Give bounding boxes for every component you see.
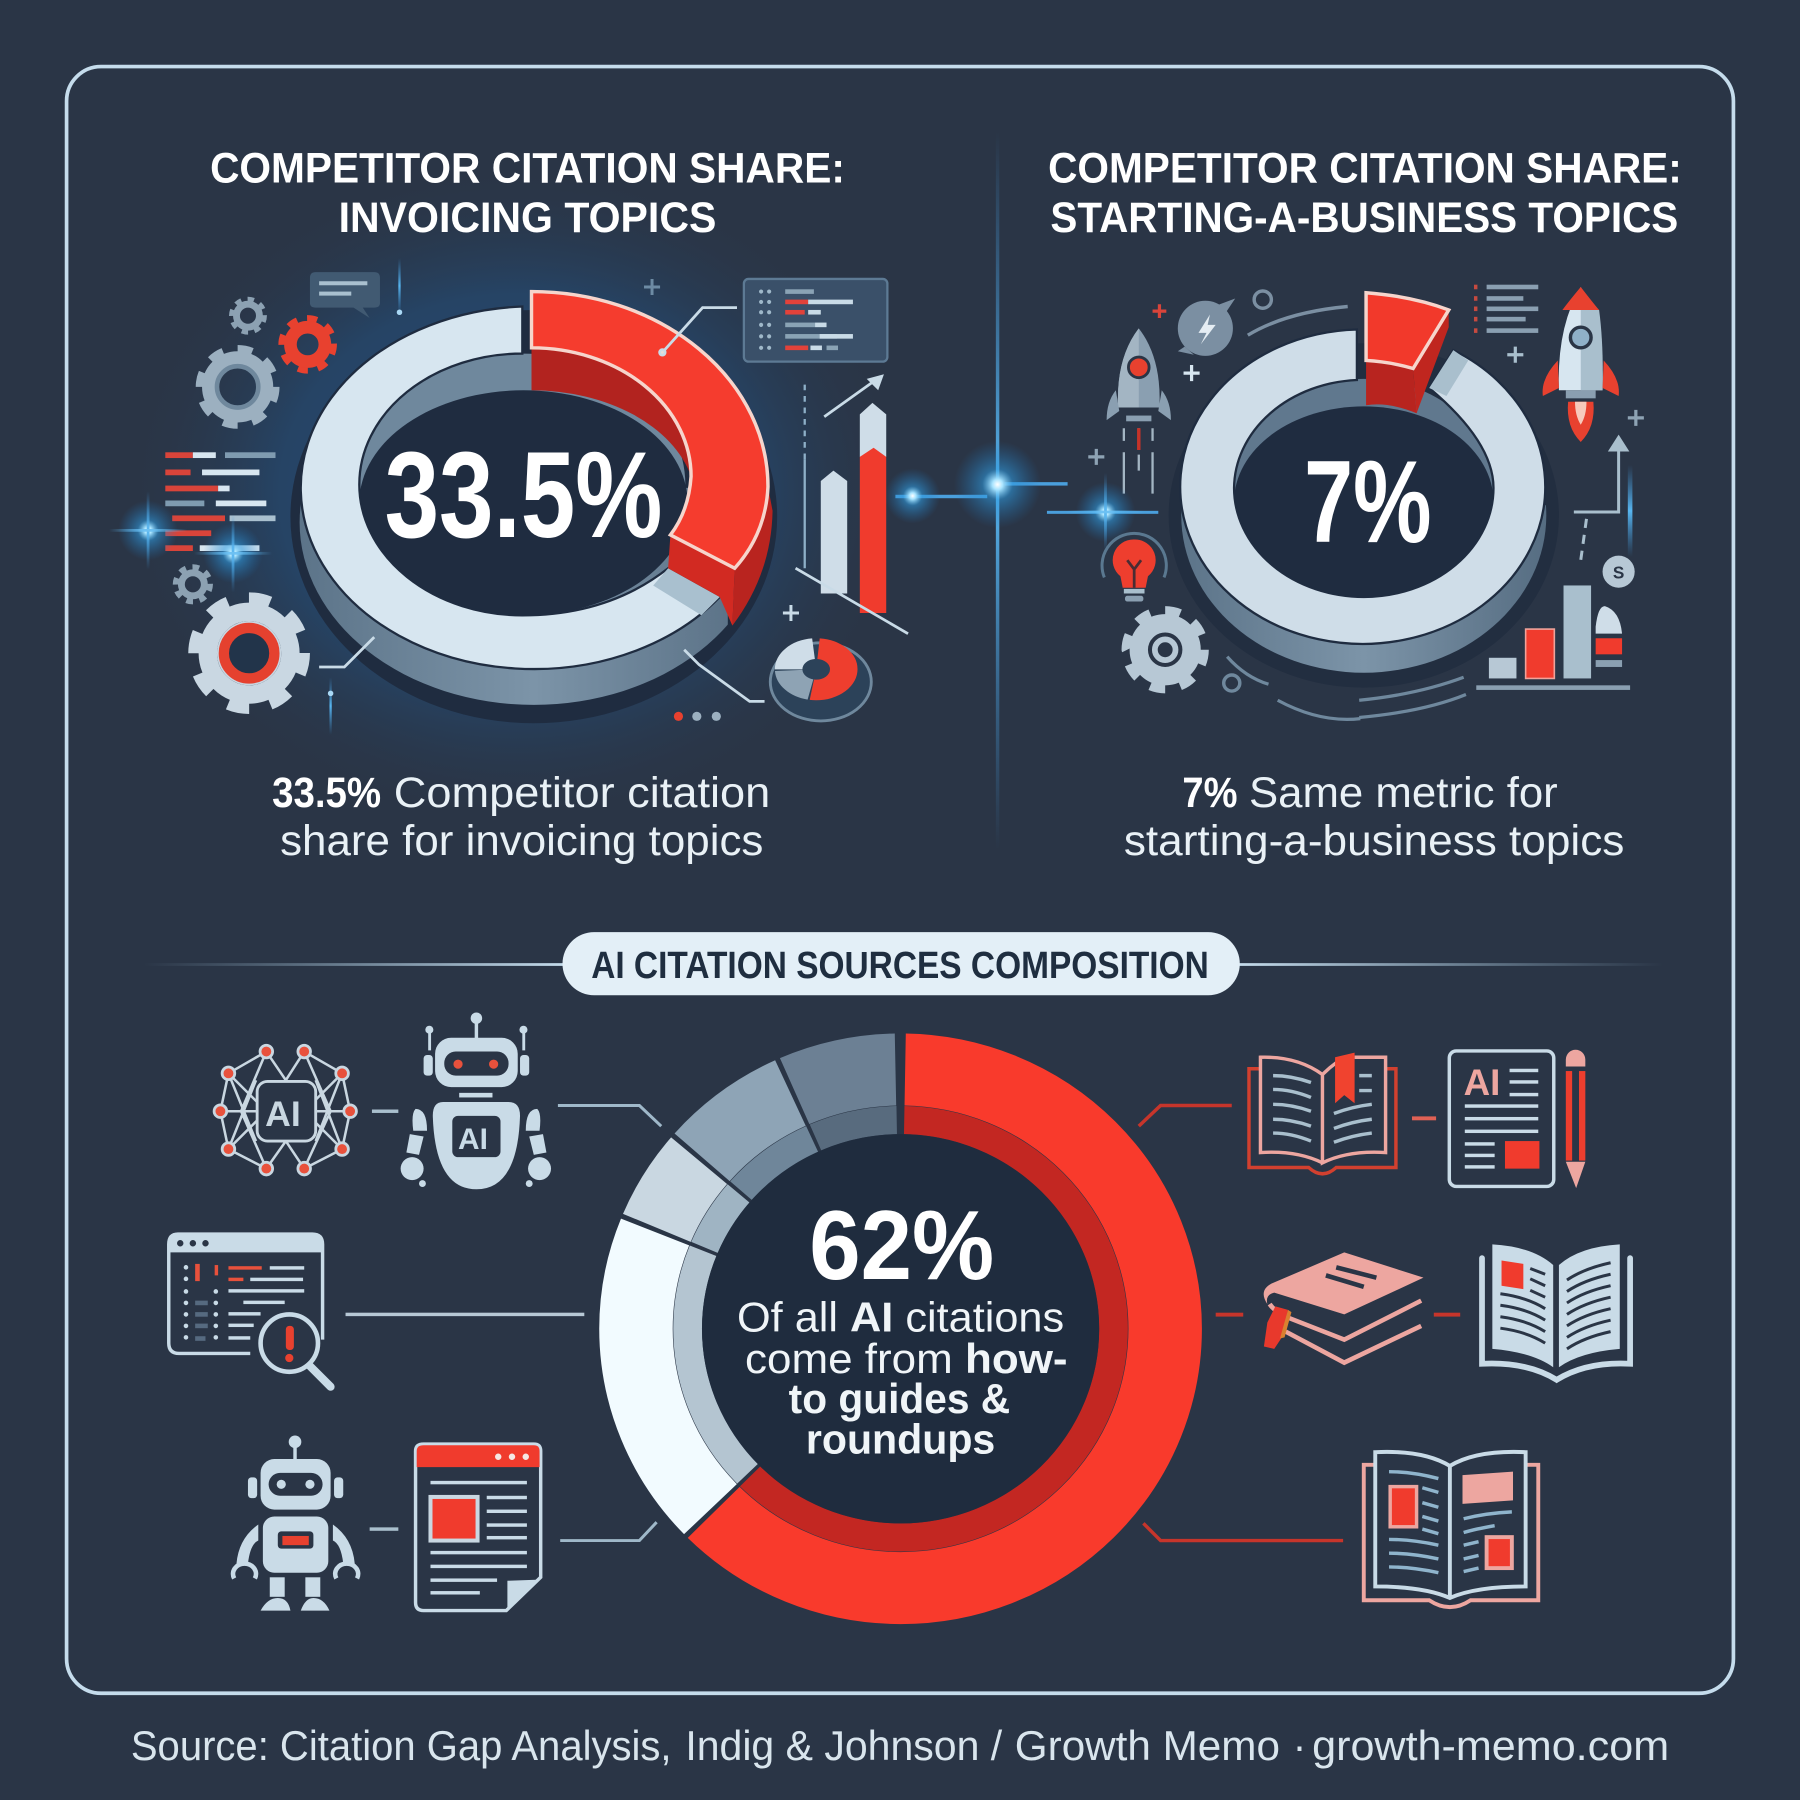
icon: lightbulb bbox=[1102, 533, 1166, 602]
connector: gear to donut bbox=[319, 637, 374, 667]
donut: starting a business 7% bbox=[1169, 293, 1559, 688]
connector: robot to donut bbox=[558, 1105, 661, 1126]
source line: Growth Memo bbox=[1015, 1723, 1280, 1769]
rocket white bbox=[1543, 287, 1619, 442]
centre light divider bbox=[885, 132, 1068, 849]
centre description bbox=[737, 1295, 1068, 1462]
chat bubble bbox=[310, 272, 380, 318]
source line: growth-memo.com bbox=[1312, 1723, 1669, 1769]
icon: AI neural network: AI bbox=[265, 1094, 301, 1134]
connector dash bbox=[1216, 1313, 1243, 1317]
connector: document to donut bbox=[560, 1522, 657, 1541]
source line bbox=[131, 1723, 1669, 1769]
growth arrow bbox=[1574, 437, 1627, 560]
icon: robot bbox=[233, 1436, 358, 1611]
plus marks left bbox=[644, 279, 799, 621]
icon: open book with bookmark bbox=[1249, 1053, 1396, 1174]
caption: starting a business bbox=[1124, 769, 1624, 864]
icon: AI article bbox=[1449, 1051, 1554, 1186]
centre value: 62%: 62% bbox=[809, 1190, 994, 1300]
title: invoicing: INVOICING TOPICS bbox=[339, 194, 716, 241]
icon: stacked books bbox=[1264, 1252, 1423, 1363]
gear large gray bbox=[201, 350, 274, 424]
connector: donut base to mini pie bbox=[684, 650, 765, 701]
icon: AI robot: AI bbox=[458, 1123, 488, 1156]
caption: starting a business: 7% bbox=[1182, 769, 1238, 816]
rocket gray bbox=[1107, 328, 1171, 494]
connector dash bbox=[372, 1110, 398, 1113]
connector dash bbox=[1412, 1116, 1436, 1120]
icon: bolt bubble bbox=[1178, 298, 1235, 356]
connector dash bbox=[370, 1527, 398, 1531]
code panel bbox=[744, 279, 887, 362]
pager dots bbox=[674, 712, 721, 721]
gear small lower bbox=[176, 567, 210, 602]
caption: starting a business: Same metric for bbox=[1249, 769, 1558, 816]
section heading pill: AI CITATION SOURCES COMPOSITION bbox=[591, 945, 1209, 987]
donut: invoicing 33.5% bbox=[290, 292, 777, 723]
value: 7%: 7% bbox=[1304, 436, 1432, 567]
centre description: to guides & bbox=[789, 1376, 1010, 1422]
light sparks right bbox=[1047, 465, 1632, 557]
gear red bbox=[282, 319, 333, 370]
caption: invoicing: 33.5% bbox=[272, 769, 381, 816]
connector: donut to lower book bbox=[1143, 1523, 1343, 1541]
glow behind invoicing donut bbox=[121, 161, 913, 827]
light sparks left bbox=[109, 491, 272, 592]
coin bbox=[1603, 556, 1635, 588]
title: starting a business bbox=[1048, 145, 1682, 241]
gear right bbox=[1127, 612, 1203, 688]
mini pie bbox=[770, 643, 871, 721]
title: invoicing bbox=[210, 145, 845, 241]
centre description: roundups bbox=[806, 1416, 995, 1462]
section heading pill bbox=[562, 932, 1240, 995]
caption: invoicing: Competitor citation bbox=[394, 769, 770, 816]
title: starting a business: COMPETITOR CITATION SHARE: bbox=[1048, 145, 1682, 192]
title: starting a business: STARTING-A-BUSINESS TOPICS bbox=[1050, 194, 1678, 241]
icon: AI article: AI bbox=[1464, 1062, 1500, 1103]
lower arcs right bbox=[1224, 657, 1466, 719]
donut: AI citation sources bbox=[636, 1069, 1165, 1588]
connector: donut to book bbox=[1139, 1105, 1232, 1126]
icon: pencil bbox=[1566, 1050, 1585, 1188]
section rules bbox=[143, 963, 1663, 966]
icon: AI robot bbox=[401, 1012, 551, 1189]
code lines left bbox=[165, 452, 276, 551]
icon: blue open book bbox=[1482, 1244, 1630, 1380]
coin: S bbox=[1613, 563, 1624, 583]
icon: magazine book bbox=[1364, 1452, 1538, 1607]
title: invoicing: COMPETITOR CITATION SHARE: bbox=[210, 145, 845, 192]
plus marks right bbox=[1088, 304, 1644, 465]
gear big red ring bbox=[196, 600, 302, 706]
bar chart right bbox=[1476, 585, 1630, 690]
spark under donut bbox=[328, 677, 333, 735]
bar chart mini bbox=[796, 374, 908, 634]
small glow spike bbox=[397, 258, 402, 315]
caption: invoicing bbox=[272, 769, 770, 864]
ring and arc top bbox=[1248, 291, 1348, 335]
connector: browser to donut bbox=[346, 1313, 584, 1316]
source line: Indig & Johnson / bbox=[685, 1723, 1003, 1769]
connector: red segment to code panel bbox=[660, 308, 737, 355]
gear small bbox=[232, 300, 264, 332]
code lines right bbox=[1474, 285, 1538, 333]
connector dash bbox=[1434, 1313, 1460, 1317]
source line: · bbox=[1293, 1723, 1306, 1769]
icon: document page bbox=[416, 1444, 541, 1611]
centre description: come from how- bbox=[745, 1336, 1068, 1382]
caption: invoicing: share for invoicing topics bbox=[280, 817, 763, 864]
caption: starting a business: starting-a-business topics bbox=[1124, 817, 1624, 864]
value: 33.5%: 33.5% bbox=[385, 427, 662, 564]
centre description: Of all AI citations bbox=[737, 1295, 1064, 1341]
source line: Source: Citation Gap Analysis, bbox=[131, 1723, 672, 1769]
icon: browser with magnifier bbox=[169, 1234, 331, 1387]
icon: AI neural network bbox=[214, 1045, 356, 1175]
